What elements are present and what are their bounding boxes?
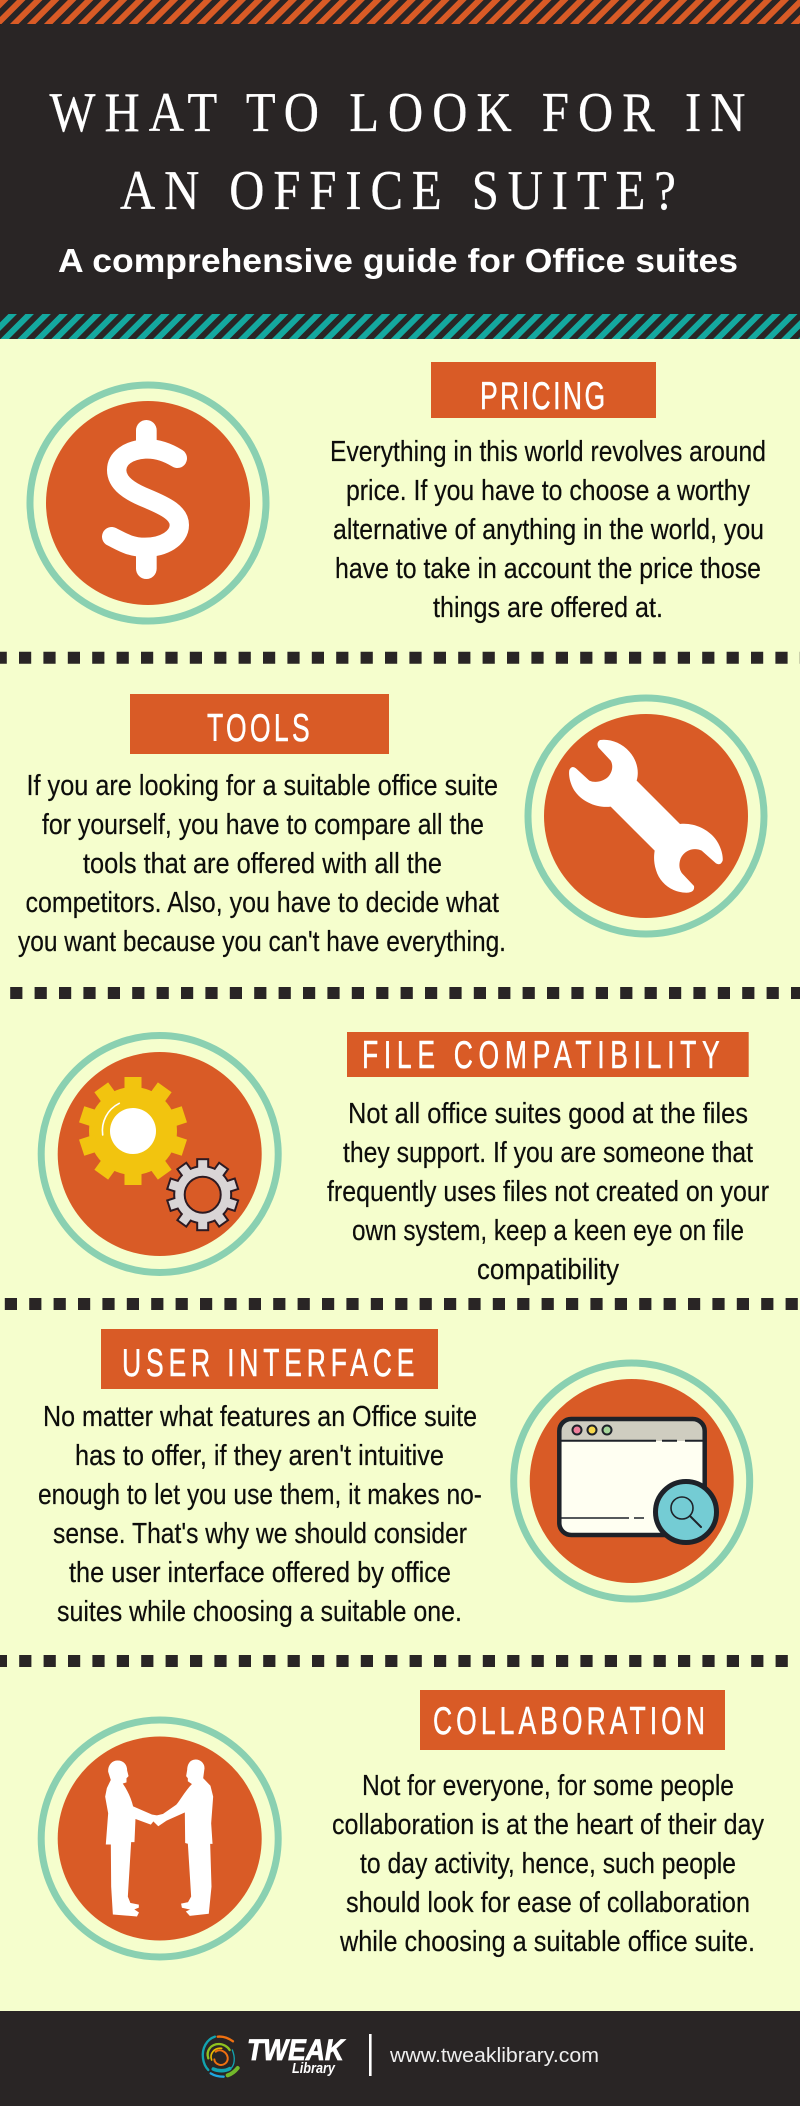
text: user interface body: sense. That's why we should consider <box>53 1518 467 1550</box>
yellow gear <box>79 1077 187 1185</box>
text: user interface body <box>38 1401 482 1628</box>
heading: collaboration <box>420 1690 725 1750</box>
title <box>50 82 746 222</box>
text: tools body: for yourself, you have to compare all the <box>42 809 484 841</box>
heading: tools <box>130 694 389 754</box>
text: pricing body: things are offered at. <box>433 592 663 624</box>
header banner <box>0 0 800 339</box>
footer <box>0 2011 800 2106</box>
heading: tools: TOOLS <box>207 707 310 750</box>
icon: browser window with magnifier <box>514 1363 750 1599</box>
title: WHAT TO LOOK FOR IN <box>50 82 746 144</box>
text: user interface body: has to offer, if they aren't intuitive <box>75 1440 444 1472</box>
icon: gears <box>41 1036 278 1272</box>
text: pricing body <box>330 436 766 624</box>
panel: collaboration <box>41 1690 764 1958</box>
text: user interface body: suites while choosing a suitable one. <box>57 1596 462 1628</box>
text: file compatibility body <box>327 1098 769 1286</box>
panel: tools <box>18 694 764 958</box>
text: user interface body: No matter what features an Office suite <box>43 1401 477 1433</box>
text: collaboration body: Not for everyone, for some people <box>362 1770 734 1802</box>
icon: dollar sign <box>30 385 266 621</box>
title: AN OFFICE SUITE? <box>120 160 676 222</box>
text: user interface body: the user interface offered by office <box>69 1557 451 1589</box>
heading: pricing: PRICING <box>480 375 605 418</box>
heading: pricing <box>431 362 656 418</box>
text: tools body: you want because you can't have everything. <box>18 926 506 958</box>
text: collaboration body: should look for ease of collaboration <box>346 1887 750 1919</box>
text: tools body <box>18 770 506 958</box>
panel: user interface <box>38 1329 750 1628</box>
heading: collaboration: COLLABORATION <box>433 1700 705 1743</box>
website url: www.tweaklibrary.com <box>389 2045 599 2067</box>
logo wordmark: Library <box>292 2061 336 2077</box>
text: tools body: tools that are offered with all the <box>83 848 442 880</box>
heading: user interface <box>101 1329 438 1389</box>
text: collaboration body <box>332 1770 764 1958</box>
icon: handshake <box>41 1720 278 1957</box>
panel: file compatibility <box>41 1032 769 1286</box>
heading: user interface: USER INTERFACE <box>122 1342 414 1385</box>
text: tools body: If you are looking for a suitable office suite <box>26 770 498 802</box>
text: file compatibility body: Not all office suites good at the files <box>348 1098 748 1130</box>
icon: tweak library logo <box>203 2037 238 2077</box>
grey gear <box>166 1158 239 1231</box>
heading: file compatibility: FILE COMPATIBILITY <box>362 1034 720 1077</box>
icon: wrench <box>528 698 764 934</box>
panel: pricing <box>30 362 766 624</box>
text: file compatibility body: compatibility <box>477 1254 619 1286</box>
orange striped band <box>0 0 800 24</box>
teal striped band <box>0 314 800 339</box>
text: user interface body: enough to let you use them, it makes no- <box>38 1479 482 1511</box>
subtitle: A comprehensive guide for Office suites <box>58 242 738 279</box>
logo wordmark: TWEAK <box>247 2034 346 2067</box>
text: tools body: competitors. Also, you have to decide what <box>26 887 499 919</box>
text: collaboration body: to day activity, hence, such people <box>360 1848 736 1880</box>
